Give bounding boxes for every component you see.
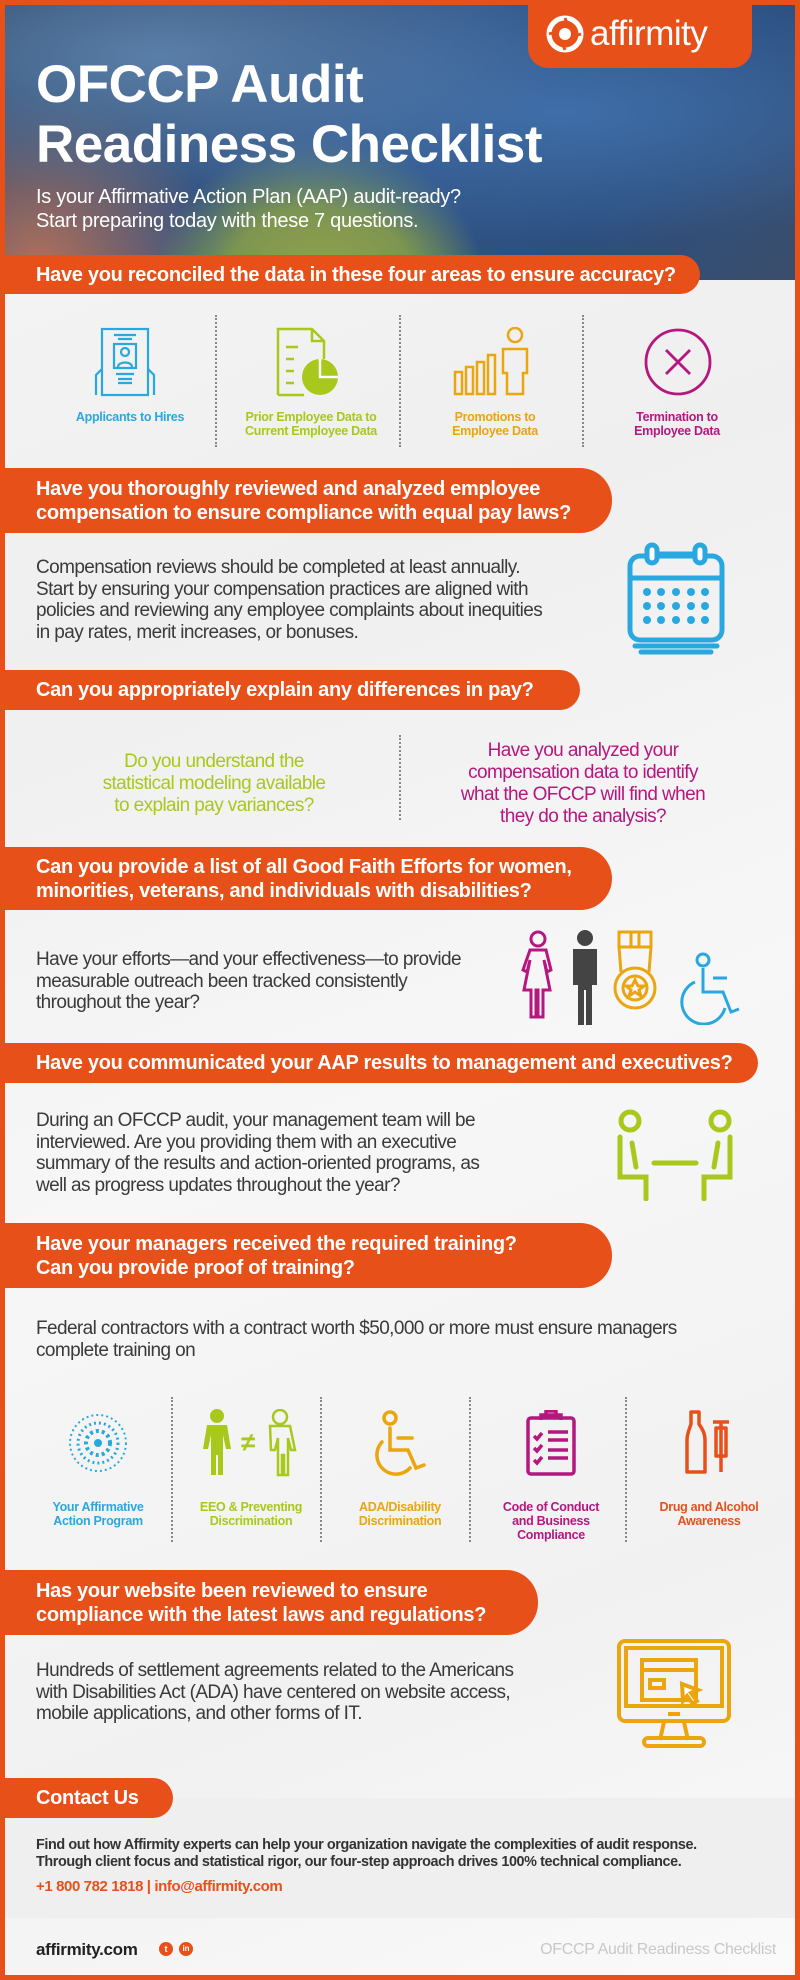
icon: monitor [617, 1639, 731, 1748]
text: statistical modeling [103, 751, 326, 816]
icon: social: t [164, 1944, 168, 1954]
text block 5: interviewed. Are you providing them with an executive [36, 1132, 456, 1153]
banner 7 [5, 1570, 538, 1635]
panel: training topics [52, 1397, 758, 1542]
icon: not equal people: ≠ [241, 1427, 255, 1457]
panel: four areas [76, 315, 720, 447]
label: ada: Discrimination [359, 1514, 441, 1528]
text block 4: Have your efforts—and your effectiveness—to provide [36, 949, 461, 970]
icon: promotion bars [454, 327, 528, 396]
text: compensation analysis: Have you analyzed your [488, 740, 678, 761]
contact panel background [5, 1798, 795, 1918]
label: ada [359, 1500, 442, 1528]
banner 4 [5, 847, 612, 910]
text block 2: Start by ensuring your compensation practices are aligned with [36, 579, 528, 600]
label: prior employee data: Prior Employee Data to [246, 410, 376, 424]
header background image [0, 0, 800, 280]
logo [528, 0, 752, 68]
label: drug and alcohol: Awareness [677, 1514, 741, 1528]
footer [36, 1940, 776, 1959]
label: promotions: Employee Data [452, 424, 538, 438]
text: compensation analysis: compensation data to identify [468, 762, 698, 783]
icon: calendar [628, 542, 724, 654]
subtitle: Start preparing today with these 7 questions. [36, 210, 418, 232]
banner 6: Can you provide proof of training? [36, 1256, 355, 1278]
title: OFCCP Audit [36, 55, 363, 114]
label: prior employee data [245, 410, 378, 438]
icon: meeting [618, 1110, 732, 1201]
banner 1 [5, 255, 700, 294]
label: eeo: EEO & Preventing [200, 1500, 302, 1514]
text block 5: summary of the results and action-oriented programs, as [36, 1153, 479, 1174]
text: compensation analysis: what the OFCCP will find when [461, 784, 705, 805]
text block 7: with Disabilities Act (ADA) have centered on website access, [36, 1682, 510, 1703]
logo: affirmity [590, 14, 707, 53]
icon: termination x [644, 328, 712, 396]
contact text: +1 800 782 1818 | info@affirmity.com [36, 1878, 282, 1895]
label: applicants: Applicants to Hires [76, 410, 184, 424]
text block 6 [36, 1318, 677, 1361]
text block 4 [36, 949, 461, 1013]
text: compensation analysis [460, 740, 705, 827]
text: statistical modeling: Do you understand the [124, 751, 304, 772]
text block 5 [36, 1110, 480, 1196]
banner 7: Has your website been reviewed to ensure [36, 1580, 427, 1602]
banner 3 [5, 670, 580, 710]
label: code of conduct: and Business [512, 1514, 590, 1528]
text block 2: policies and reviewing any employee complaints about inequities [36, 600, 542, 621]
icon: document chart [276, 328, 338, 396]
text block 2: in pay rates, merit increases, or bonuses. [36, 622, 358, 643]
banner 6: Have your managers received the required training? [36, 1232, 517, 1254]
text: compensation analysis: they do the analysis? [500, 806, 666, 827]
title: Readiness Checklist [36, 115, 542, 174]
text block 5: During an OFCCP audit, your management team will be [36, 1110, 475, 1131]
label: code of conduct [503, 1500, 600, 1542]
label: termination: Employee Data [634, 424, 720, 438]
text block 7: Hundreds of settlement agreements related to the Americans [36, 1660, 513, 1681]
icon: social: in [182, 1944, 190, 1953]
label: affirmative action [52, 1500, 144, 1528]
label: promotions [452, 410, 538, 438]
contact text: Through client focus and statistical rigor, our four-step approach drives 100% technical compliance. [36, 1854, 681, 1870]
label: termination: Termination to [636, 410, 718, 424]
text block 4: throughout the year? [36, 992, 199, 1013]
banner: contact us [5, 1778, 173, 1818]
banner 4: Can you provide a list of all Good Faith Efforts for women, [36, 856, 572, 878]
text block 2: Compensation reviews should be completed at least annually. [36, 557, 520, 578]
text block 7: mobile applications, and other forms of IT. [36, 1703, 362, 1724]
label: code of conduct: Compliance [517, 1528, 585, 1542]
banner 2: Have you thoroughly reviewed and analyzed employee [36, 478, 540, 500]
text: statistical modeling: to explain pay variances? [114, 795, 314, 816]
text block 2 [36, 557, 542, 643]
footer website: affirmity.com [36, 1940, 138, 1959]
banner 4: minorities, veterans, and individuals with disabilities? [36, 880, 532, 902]
icon: applicant [94, 328, 156, 396]
banner 6 [5, 1223, 612, 1288]
panel: pay differences [103, 735, 705, 827]
text: statistical modeling: statistical modeling available [103, 773, 325, 794]
title [36, 55, 542, 174]
banner 5: Have you communicated your AAP results to management and executives? [36, 1052, 732, 1074]
banner 5 [5, 1043, 758, 1083]
icon: bottle syringe [685, 1410, 729, 1474]
label: code of conduct: Code of Conduct [503, 1500, 599, 1514]
label: eeo: Discrimination [210, 1514, 292, 1528]
contact text: Find out how Affirmity experts can help your organization navigate the complexities of audit response. [36, 1837, 697, 1853]
text block 6: Federal contractors with a contract worth $50,000 or more must ensure managers [36, 1318, 677, 1339]
text block 5: well as progress updates throughout the year? [36, 1175, 400, 1196]
icon: globe dots [69, 1414, 127, 1472]
banner 2 [5, 468, 612, 533]
banner 7: compliance with the latest laws and regulations? [36, 1604, 486, 1626]
banner 3: Can you appropriately explain any differences in pay? [36, 679, 534, 701]
label: affirmative action: Your Affirmative [52, 1500, 144, 1514]
icon: not equal people [203, 1409, 296, 1476]
label: drug and alcohol: Drug and Alcohol [660, 1500, 758, 1514]
contact text [36, 1837, 697, 1895]
text block 7 [36, 1660, 514, 1724]
icon: social [159, 1942, 193, 1956]
subtitle: Is your Affirmative Action Plan (AAP) audit-ready? [36, 186, 461, 208]
label: affirmative action: Action Program [53, 1514, 143, 1528]
label: promotions: Promotions to [455, 410, 535, 424]
footer title: OFCCP Audit Readiness Checklist [540, 1941, 776, 1958]
banner: contact us: Contact Us [36, 1787, 139, 1809]
label: eeo [200, 1500, 302, 1528]
label: prior employee data: Current Employee Data [245, 424, 377, 438]
text block 6: complete training on [36, 1340, 195, 1361]
icons: diversity [521, 930, 740, 1025]
banner 2: compensation to ensure compliance with equal pay laws? [36, 502, 571, 524]
label: drug and alcohol [660, 1500, 758, 1528]
text block 4: measurable outreach been tracked consistently [36, 971, 407, 992]
subtitle [36, 186, 461, 232]
banner 1: Have you reconciled the data in these four areas to ensure accuracy? [36, 264, 676, 286]
label: ada: ADA/Disability [359, 1500, 441, 1514]
icon: clipboard [526, 1410, 576, 1476]
label: termination [634, 410, 720, 438]
icon: wheelchair [375, 1410, 426, 1476]
